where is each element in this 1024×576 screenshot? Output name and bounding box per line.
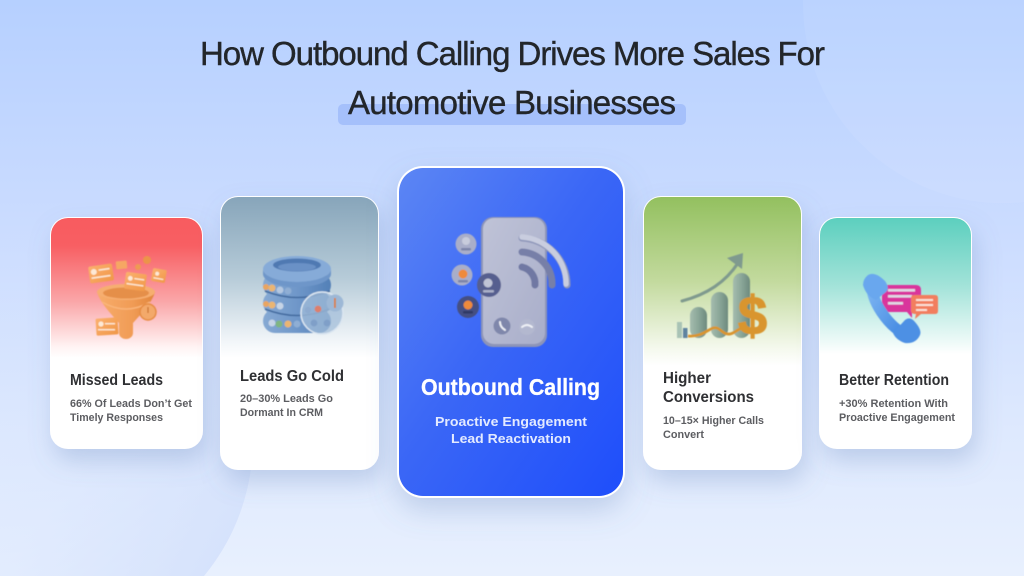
title xyxy=(200,35,825,125)
icon: handset with chat bubbles xyxy=(863,274,938,343)
heading: leads go cold: Leads Go Cold xyxy=(240,368,344,385)
text block: better retention: +30% Retention With xyxy=(839,398,948,410)
panel: leads go cold xyxy=(220,196,379,470)
text block: higher conversions: 10–15× Higher Calls xyxy=(663,415,764,427)
text block: missed leads xyxy=(70,398,192,424)
icon: growth chart xyxy=(677,253,767,346)
title: How Outbound Calling Drives More Sales For xyxy=(200,35,825,72)
text block: missed leads: Timely Responses xyxy=(70,412,163,424)
panel: outbound calling xyxy=(397,166,625,498)
panel: higher conversions xyxy=(643,196,802,470)
text block: missed leads: 66% Of Leads Don’t Get xyxy=(70,398,192,410)
text block: outbound calling xyxy=(435,414,588,446)
text block: leads go cold: Dormant In CRM xyxy=(240,407,323,419)
text block: higher conversions xyxy=(663,415,764,441)
heading: outbound calling: Outbound Calling xyxy=(421,374,600,400)
icon: database xyxy=(263,256,344,334)
text block: outbound calling: Lead Reactivation xyxy=(451,431,571,446)
panel: better retention xyxy=(819,217,972,449)
text block: leads go cold xyxy=(240,393,333,419)
heading: missed leads: Missed Leads xyxy=(70,372,163,389)
text block: leads go cold: 20–30% Leads Go xyxy=(240,393,333,405)
text block: better retention: Proactive Engagement xyxy=(839,412,955,424)
heading: higher conversions xyxy=(663,370,754,406)
icon: growth chart: $ xyxy=(738,286,767,346)
heading: better retention: Better Retention xyxy=(839,372,949,389)
lens xyxy=(301,292,343,334)
heading: higher conversions: Conversions xyxy=(663,389,754,406)
title: Automotive Businesses xyxy=(348,84,676,121)
heading: higher conversions: Higher xyxy=(663,370,711,387)
icon: phone with signal xyxy=(452,217,567,347)
text block: higher conversions: Convert xyxy=(663,429,704,441)
panel: missed leads xyxy=(50,217,203,449)
text block: outbound calling: Proactive Engagement xyxy=(435,414,588,429)
icon: funnel xyxy=(88,256,167,339)
text block: better retention xyxy=(839,398,955,424)
